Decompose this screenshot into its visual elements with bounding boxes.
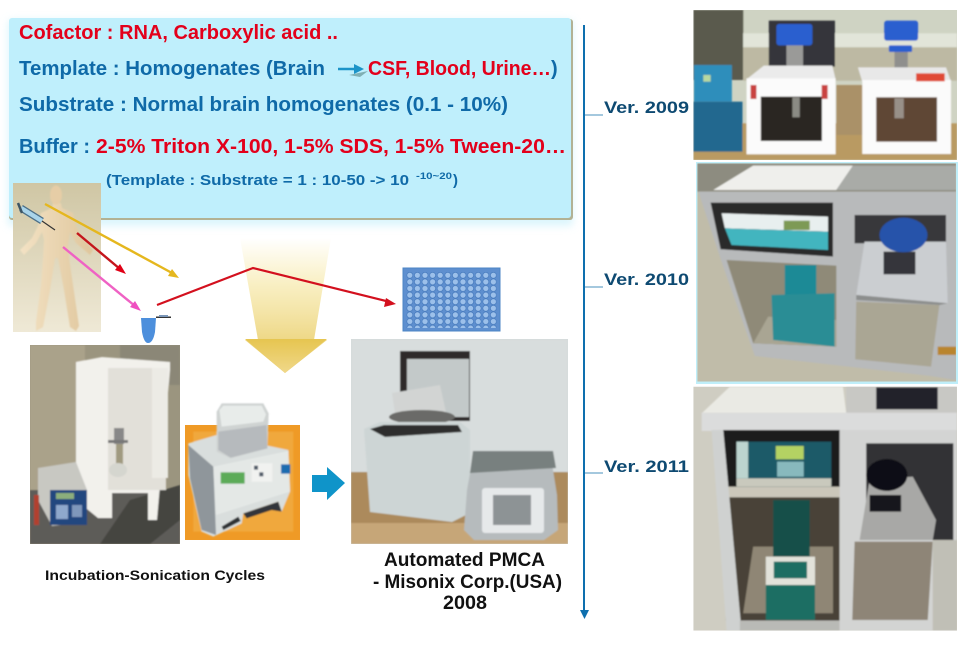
photo: version 2011 cabinet (693, 387, 957, 631)
label: version 2010: Ver. 2010 (604, 270, 689, 289)
arrow: pink from body to tube (63, 247, 141, 311)
timeline arrow (580, 25, 603, 619)
human figure (20, 203, 93, 331)
icon: sample tube (141, 315, 171, 343)
text: automated PMCA caption: Automated PMCA (384, 549, 545, 571)
photo: version 2009 instruments (693, 10, 957, 160)
photo: human body with syringe (13, 183, 101, 332)
text: exponent close parenthesis: ) (453, 172, 458, 189)
text: template to substrate ratio: (Template : Substrate = 1 : 10-50 -> 10 (106, 172, 409, 189)
icon: blue process arrow (312, 467, 345, 500)
text: closing parenthesis: ) (551, 58, 558, 80)
photo: thermoshaker on orange background (185, 403, 300, 540)
text: cofactor: Cofactor : RNA, Carboxylic acid .. (19, 22, 338, 44)
text: substrate: Substrate : Normal brain homogenates (0.1 - 10%) (19, 94, 508, 116)
panel: PMCA conditions (8, 18, 573, 226)
arrow: yellow from body to tube (45, 204, 179, 278)
photo: version 2010 cabinet (696, 162, 958, 384)
text: template samples: CSF, Blood, Urine… (368, 58, 551, 80)
text: buffer contents: 2-5% Triton X-100, 1-5% SDS, 1-5% Tween-20… (96, 136, 566, 158)
arrow: red sample to plate (157, 268, 396, 307)
icon: syringe (18, 203, 55, 230)
head (50, 186, 62, 204)
text: automated PMCA caption: - Misonix Corp.(USA) (373, 571, 562, 593)
text: buffer label: Buffer : (19, 136, 90, 158)
photo: sonicator cabinet (30, 345, 180, 544)
icon: 96-well plate (403, 268, 500, 331)
arrow: dark red from body to tube (77, 233, 126, 274)
text: exponent: -10~20 (416, 171, 452, 181)
text: automated PMCA caption (373, 549, 562, 614)
yellow downward arrow (240, 238, 331, 373)
text: template: Template : Homogenates (Brain (19, 58, 325, 80)
label: version 2011: Ver. 2011 (604, 457, 689, 476)
icon: small arrow brain to CSF (338, 64, 368, 77)
label: version 2009: Ver. 2009 (604, 98, 689, 117)
text: incubation-sonication caption: Incubation-Sonication Cycles (45, 567, 265, 583)
photo: automated PMCA instrument (351, 339, 568, 544)
text: automated PMCA caption: 2008 (443, 592, 487, 614)
